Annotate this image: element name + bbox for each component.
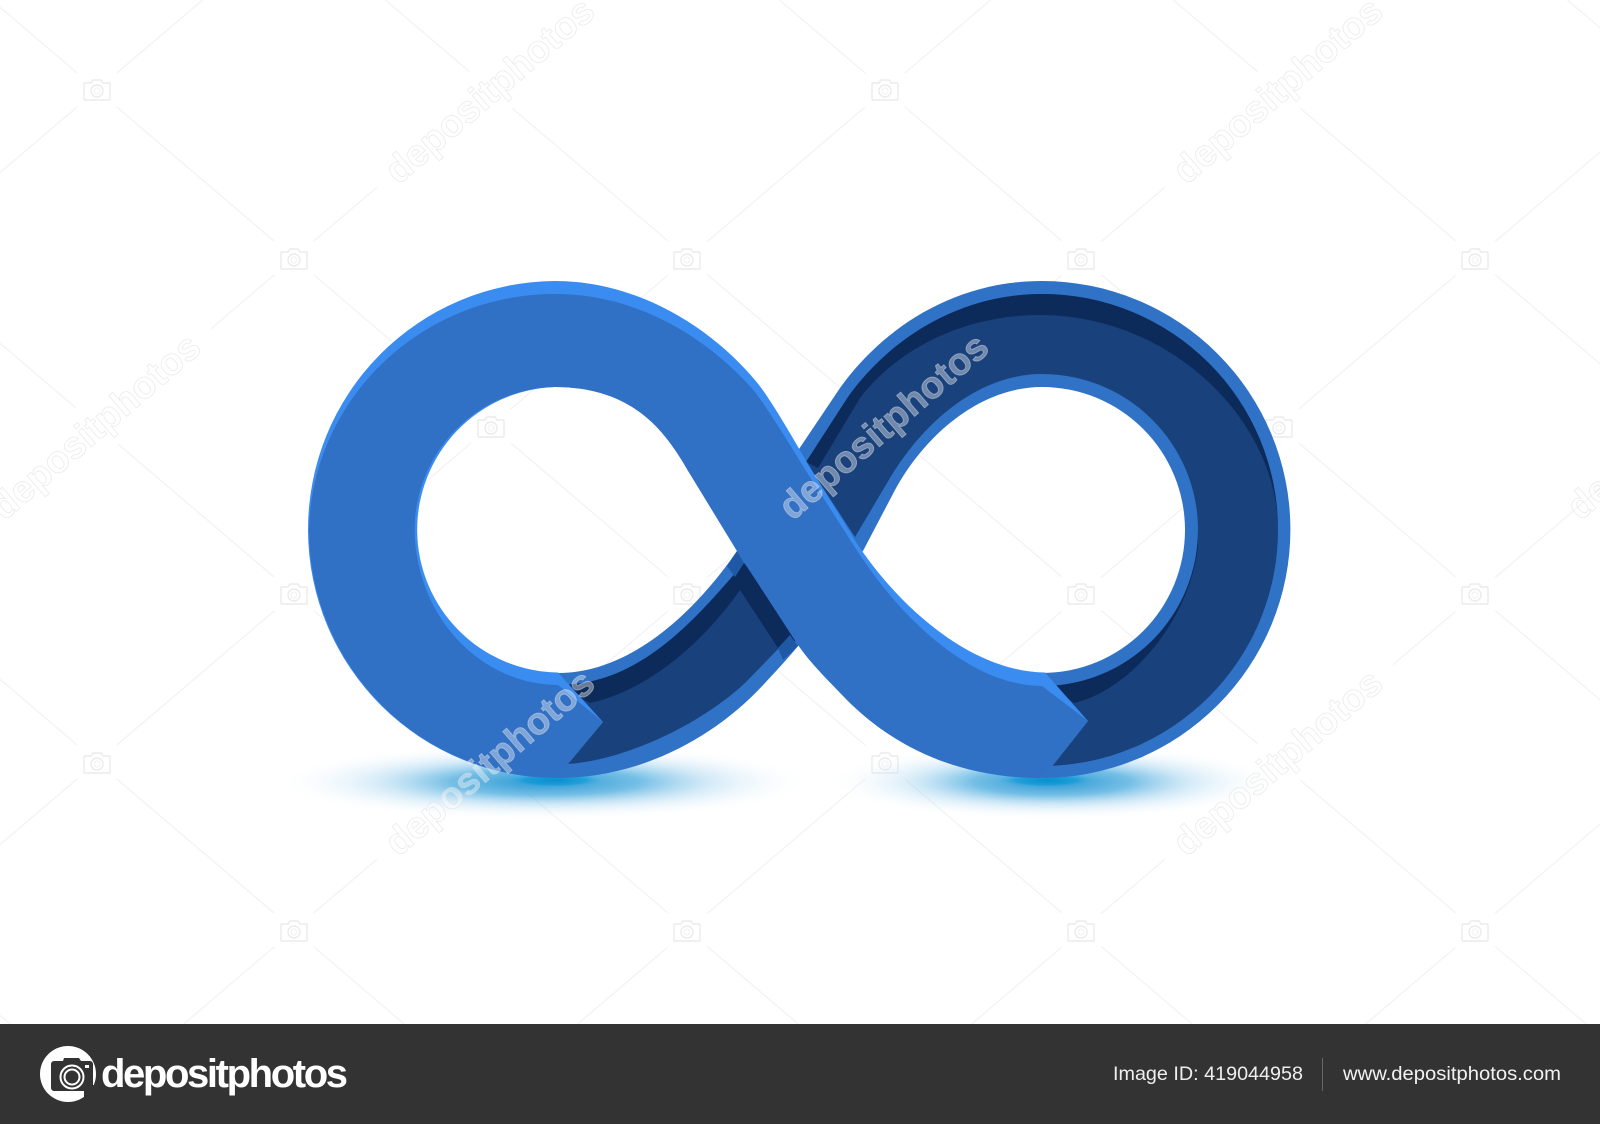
back ribbon dark face left bbox=[558, 563, 800, 764]
back ribbon bbox=[558, 281, 1290, 778]
watermark text: depositphotos bbox=[377, 662, 603, 864]
back ribbon dark face right bbox=[806, 294, 1278, 766]
infinity symbol bbox=[308, 281, 1290, 778]
divider bbox=[1322, 1058, 1323, 1091]
lattice gaps around watermarks and cameras bbox=[0, 0, 1501, 956]
back ribbon rim bbox=[558, 281, 1290, 778]
front ribbon face bbox=[309, 294, 1088, 778]
shade top right bbox=[806, 294, 1278, 530]
logo wordmark: depositphotos bbox=[101, 1052, 348, 1096]
front ribbon light edge bbox=[308, 281, 1088, 778]
watermark text: depositphotos bbox=[1165, 662, 1391, 864]
watermark text bbox=[0, 0, 1600, 864]
footer bar bbox=[0, 1024, 1600, 1124]
watermark camera icons bbox=[84, 80, 1488, 941]
rim shadow at crossing bbox=[727, 551, 798, 660]
shade around right hole bbox=[1050, 530, 1198, 703]
ground shadows bbox=[275, 744, 1277, 820]
website url: www.depositphotos.com bbox=[1342, 1063, 1561, 1085]
icon: camera logo bbox=[40, 1046, 97, 1102]
shade lower left bbox=[558, 563, 798, 703]
image id: Image ID: 419044958 bbox=[1113, 1063, 1303, 1085]
watermark text: depositphotos bbox=[771, 326, 997, 528]
front ribbon bbox=[308, 281, 1088, 778]
